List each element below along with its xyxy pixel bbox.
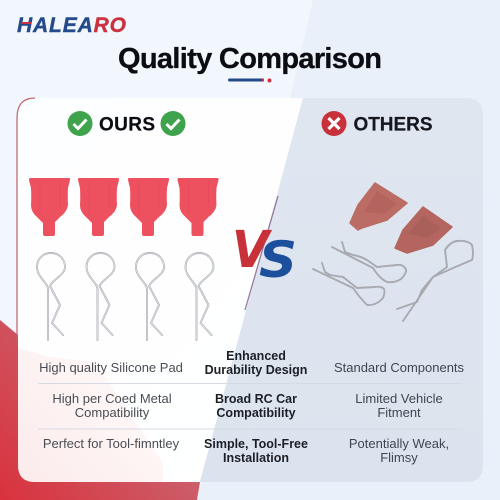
feature table text: Compatibility [216,406,296,420]
title underline [228,78,272,82]
logo: HALEARO [17,14,126,37]
feature table text: Enhanced [226,349,286,363]
feature table text: Simple, Tool-Free [204,437,308,451]
ours heading [68,111,186,136]
vs badge: V [232,221,272,280]
feature table text [204,349,308,465]
others clips [313,241,473,321]
others table text: Limited Vehicle [355,391,443,406]
ours table text [39,360,183,451]
ours pads [29,178,219,236]
ours heading: OURS [99,114,155,136]
title: Quality Comparison [118,43,382,75]
dividers [38,384,462,429]
feature table text: Broad RC Car [215,392,297,406]
panel: ours [17,98,303,482]
feature table text: Durability Design [205,363,307,377]
others table text: Potentially Weak, [349,436,449,451]
feature table text: Installation [223,451,289,465]
others heading: OTHERS [354,114,432,136]
vs badge [232,196,297,310]
panel: others [200,98,483,482]
ours table text: Perfect for Tool-fimntley [43,436,180,451]
others table text: Standard Components [334,360,465,375]
ours table text: High quality Silicone Pad [39,360,183,375]
ours table text: High per Coed Metal [52,391,172,406]
others table text: Flimsy [380,450,418,465]
others pads [350,183,452,253]
ours clips [37,253,214,340]
vs badge: S [259,231,297,289]
others table text: Fitment [377,405,421,420]
others heading [322,111,432,136]
ours table text: Compatibility [75,405,150,420]
others table text [334,360,465,465]
